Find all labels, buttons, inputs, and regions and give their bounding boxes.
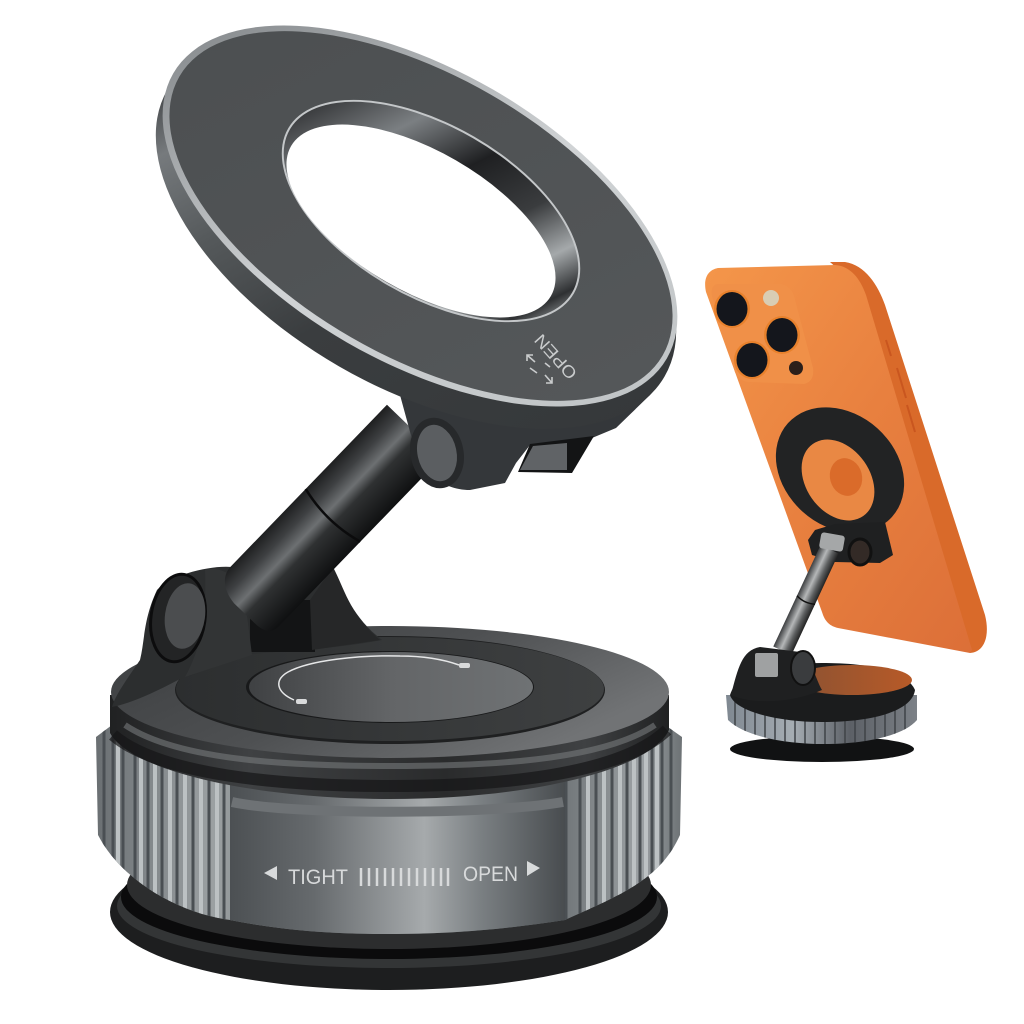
top recessed disc [175, 636, 605, 744]
ring centre wall [248, 57, 614, 365]
ring front face [109, 0, 733, 477]
front metal plate [230, 780, 565, 934]
small suction cup [730, 736, 914, 762]
arm tube [214, 405, 442, 637]
underside housing [400, 395, 650, 490]
pivot cap [408, 417, 466, 489]
dial label: tight and open: OPEN [463, 863, 518, 886]
lidar [789, 361, 803, 375]
recess cylinder [520, 443, 567, 470]
hinge cap [849, 539, 871, 565]
main car mount [90, 0, 742, 990]
rotating dial [246, 651, 534, 723]
ring centre rim [245, 54, 617, 368]
small lid [730, 663, 915, 722]
small hinge [808, 522, 893, 563]
hinge shoulder [112, 567, 382, 707]
rear recess [518, 436, 594, 473]
ring rim [100, 0, 740, 485]
lenses [714, 290, 750, 328]
open label with arrows: OPEN [531, 330, 581, 383]
phone reflection in lid [792, 665, 912, 695]
rotate arrow [279, 656, 459, 700]
hinge cap [161, 581, 209, 651]
base hinge pin [755, 653, 778, 677]
phone back [705, 265, 972, 653]
camera module [712, 284, 813, 384]
ring opening [256, 85, 586, 357]
small base hinge [731, 647, 822, 701]
apple logo [826, 455, 866, 499]
black lid [110, 626, 669, 799]
hinge pin [819, 532, 845, 552]
knurl ribs [102, 728, 672, 920]
knurled adjustment ring [96, 720, 682, 940]
lock icons on dial [296, 663, 470, 704]
side buttons [886, 340, 915, 432]
dial label: tight and open: TIGHT [288, 866, 348, 889]
small knurled ring [726, 695, 917, 744]
base hinge cap [791, 651, 815, 685]
magnetic ring head [90, 0, 742, 510]
small arm rod [773, 545, 839, 655]
centre hinge block [250, 600, 315, 652]
flash [763, 290, 779, 306]
base hinge [112, 567, 382, 707]
dial label: tight and open [264, 861, 540, 889]
hinge band [185, 569, 252, 677]
folding arm [214, 405, 442, 637]
magnetic ring on phone [751, 382, 929, 558]
phone on small mount [705, 262, 987, 762]
ring side wall [90, 0, 742, 510]
phone side band [830, 262, 987, 653]
suction cup base [110, 821, 668, 990]
right support [310, 567, 380, 650]
hinge socket [145, 571, 211, 665]
